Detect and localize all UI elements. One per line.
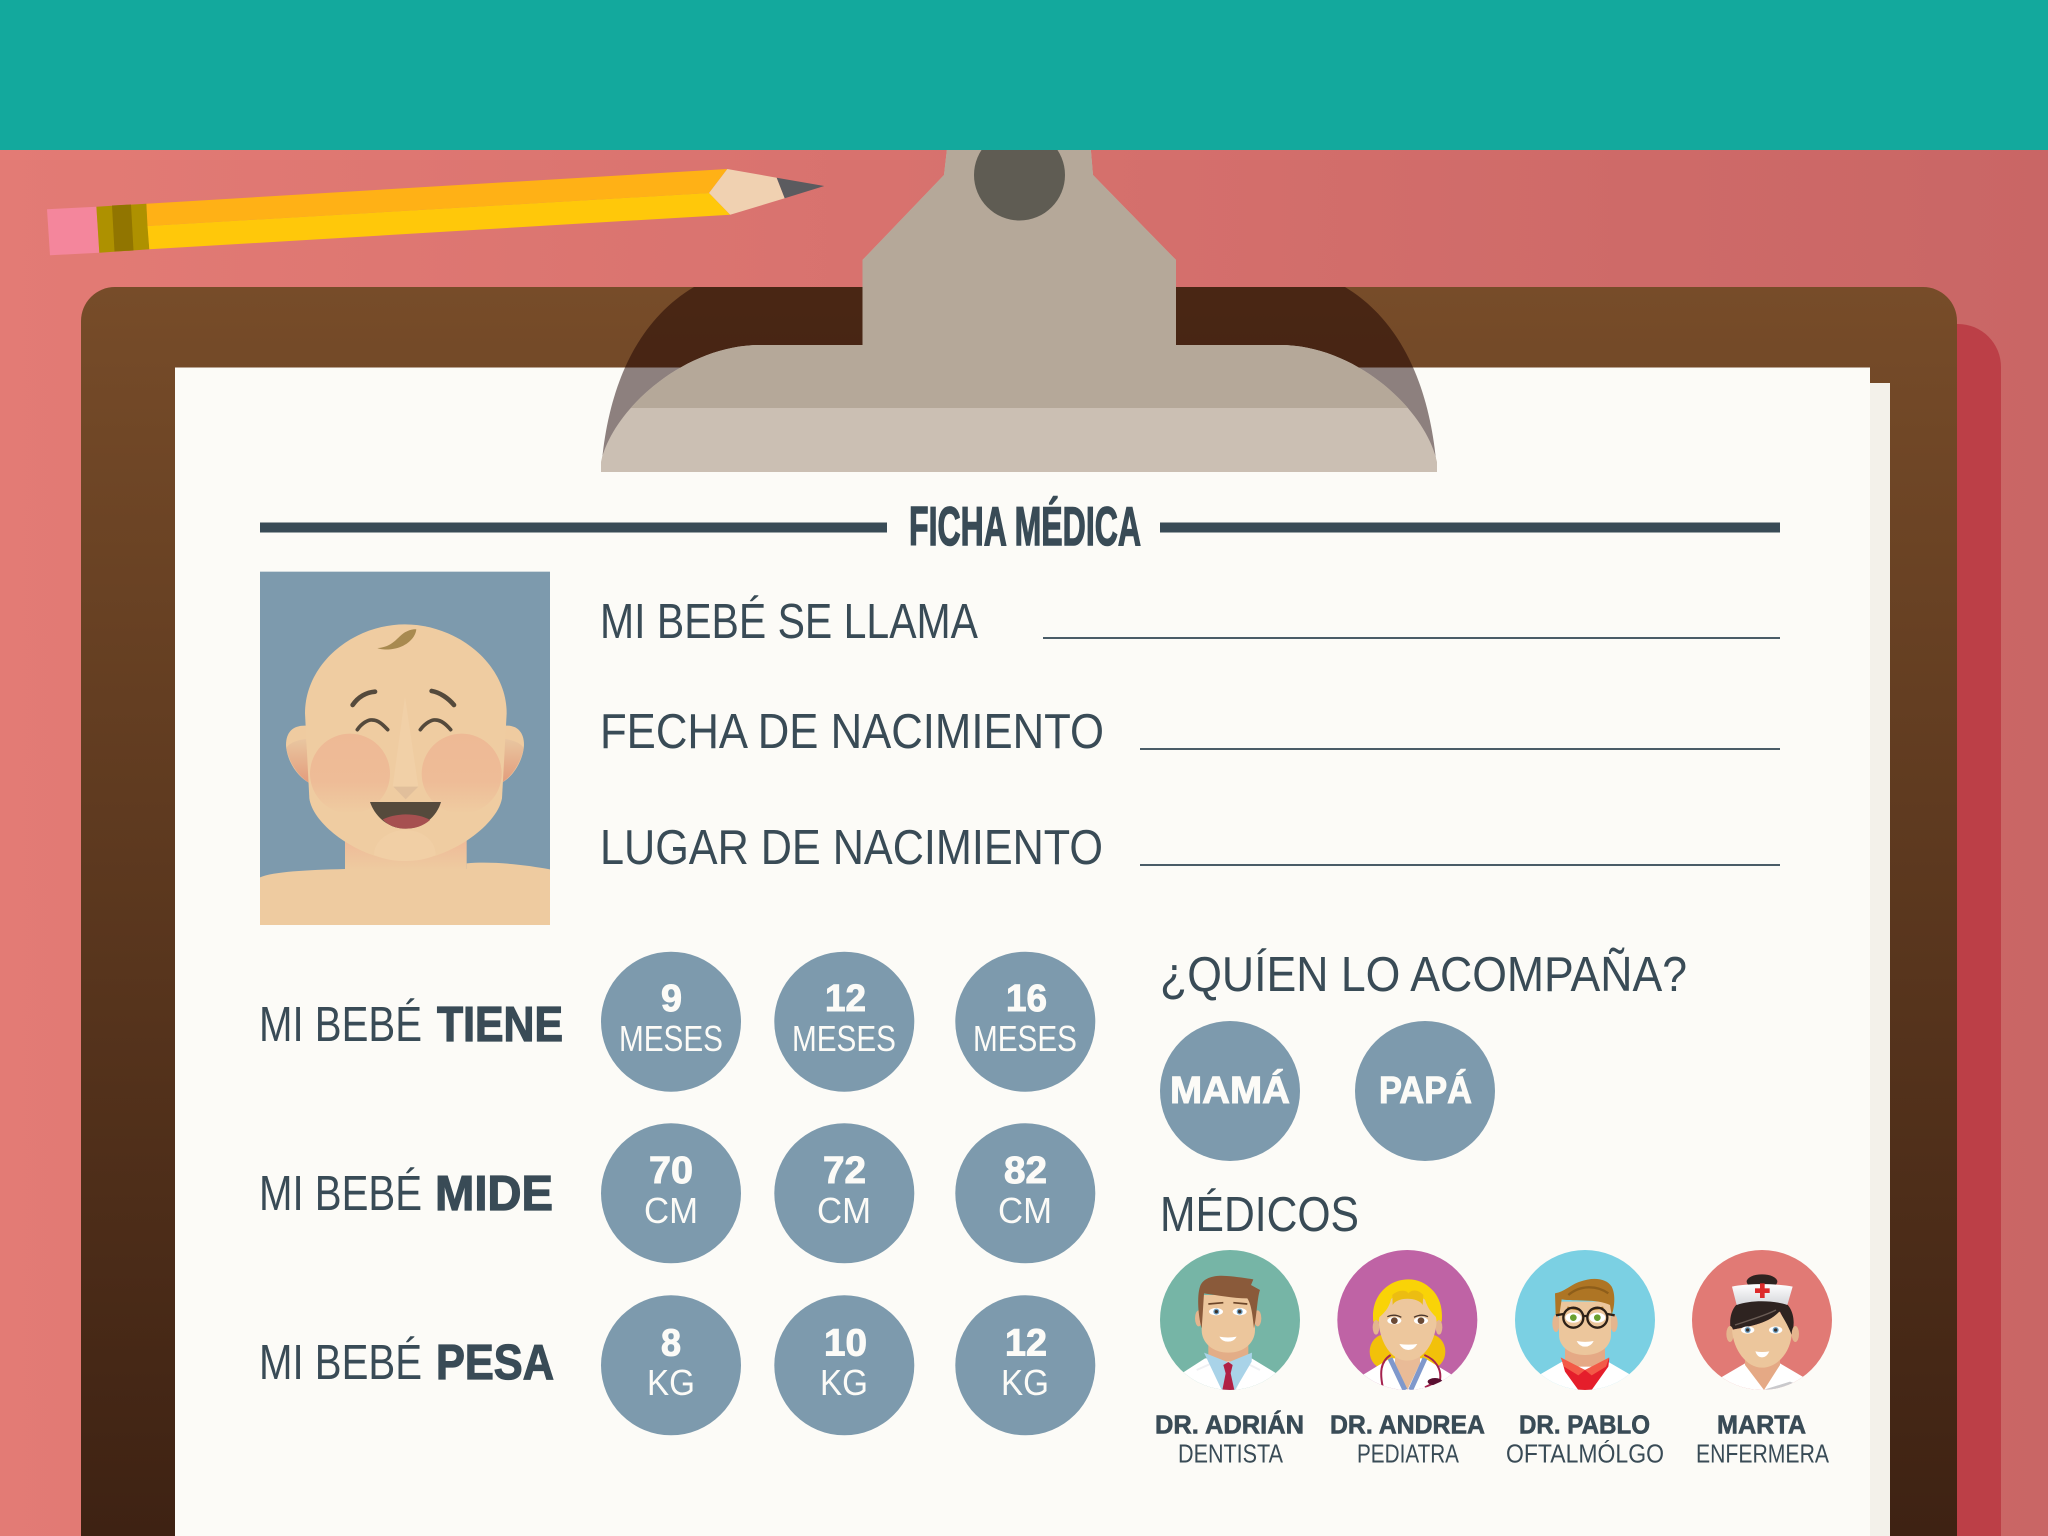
name: dr. andrea pediatra: DR. ANDREA (1330, 1410, 1485, 1440)
label: mi bebé mide: MI BEBÉ (259, 1167, 422, 1221)
option: mamá: MAMÁ (1170, 1068, 1290, 1112)
option: 8 kg (601, 1295, 741, 1435)
option: 16 meses: 16 (1006, 978, 1047, 1020)
option: 12 meses: 12 (825, 978, 866, 1020)
label: mi bebé pesa: MI BEBÉ (259, 1336, 422, 1390)
option: 9 meses: 9 (661, 978, 682, 1020)
field: birth place: LUGAR DE NACIMIENTO (600, 821, 1103, 875)
baby portrait (260, 572, 550, 925)
avatar: dr. andrea (1337, 1250, 1477, 1393)
name: dr. pablo oftalmólogo (1506, 1410, 1664, 1468)
heading: médicos: MÉDICOS (1160, 1188, 1359, 1242)
name: dr. adrián dentista (1155, 1410, 1304, 1468)
option: 70 cm: 70 (649, 1150, 693, 1192)
option: 12 kg (955, 1295, 1095, 1435)
name: dr. pablo oftalmólogo: DR. PABLO (1519, 1410, 1650, 1440)
label: mi bebé tiene: MI BEBÉ (259, 998, 422, 1052)
option: papá: PAPÁ (1379, 1068, 1472, 1112)
option: 72 cm: 72 (823, 1150, 866, 1192)
name: marta enfermera (1696, 1410, 1830, 1468)
field: birth date: FECHA DE NACIMIENTO (600, 705, 1104, 759)
heading: ficha médica (260, 495, 1780, 557)
option: 12 kg: KG (1001, 1362, 1049, 1403)
name: dr. pablo oftalmólogo: OFTALMÓLGO (1506, 1438, 1664, 1468)
option: 82 cm (955, 1123, 1095, 1263)
label: mi bebé tiene (259, 998, 563, 1052)
name: dr. adrián dentista: DENTISTA (1178, 1438, 1284, 1468)
option: 9 meses (601, 952, 741, 1092)
avatar: dr. adrián (1160, 1250, 1300, 1393)
second sheet of paper (1800, 383, 1890, 1536)
option: 72 cm: CM (817, 1190, 871, 1231)
metal clip (601, 130, 1437, 472)
avatar: dr. pablo (1515, 1250, 1655, 1393)
option: 16 meses (955, 952, 1095, 1092)
option: 10 kg (774, 1295, 914, 1435)
clip shadow (601, 287, 1437, 472)
name: marta enfermera: ENFERMERA (1696, 1438, 1830, 1468)
pencil (47, 169, 824, 255)
option: 10 kg: 10 (824, 1322, 867, 1364)
option: 9 meses: MESES (619, 1018, 723, 1059)
name: marta enfermera: MARTA (1717, 1410, 1806, 1440)
option: 82 cm: 82 (1004, 1150, 1047, 1192)
heading: quién lo acompaña: ¿QUÍEN LO ACOMPAÑA? (1160, 948, 1687, 1002)
name: dr. adrián dentista: DR. ADRIÁN (1155, 1410, 1304, 1440)
label: mi bebé pesa: PESA (436, 1336, 554, 1390)
label: mi bebé tiene: TIENE (437, 998, 563, 1052)
option: 12 meses: MESES (792, 1018, 896, 1059)
option: 12 meses (774, 952, 914, 1092)
clipboard board (81, 287, 1957, 1536)
back cover of clipboard (1900, 324, 2001, 1536)
paper sheet (175, 368, 1870, 1536)
heading: ficha médica: FICHA MÉDICA (909, 495, 1141, 557)
label: mi bebé mide: MIDE (435, 1167, 553, 1221)
option: 10 kg: KG (820, 1362, 868, 1403)
option: 12 kg: 12 (1005, 1322, 1047, 1364)
option: 70 cm (601, 1123, 741, 1263)
option: mamá (1160, 1021, 1300, 1161)
option: 8 kg: KG (647, 1362, 695, 1403)
field: baby name: MI BEBÉ SE LLAMA (600, 595, 978, 649)
option: 70 cm: CM (644, 1190, 698, 1231)
top teal band (0, 0, 2048, 150)
avatar: marta (1692, 1250, 1832, 1393)
option: 8 kg: 8 (661, 1322, 681, 1364)
label: mi bebé pesa (259, 1336, 554, 1390)
label: mi bebé mide (259, 1167, 553, 1221)
option: 72 cm (774, 1123, 914, 1263)
name: dr. andrea pediatra: PEDIATRA (1357, 1438, 1460, 1468)
option: papá (1355, 1021, 1495, 1161)
option: 82 cm: CM (998, 1190, 1052, 1231)
name: dr. andrea pediatra (1330, 1410, 1485, 1468)
option: 16 meses: MESES (973, 1018, 1077, 1059)
